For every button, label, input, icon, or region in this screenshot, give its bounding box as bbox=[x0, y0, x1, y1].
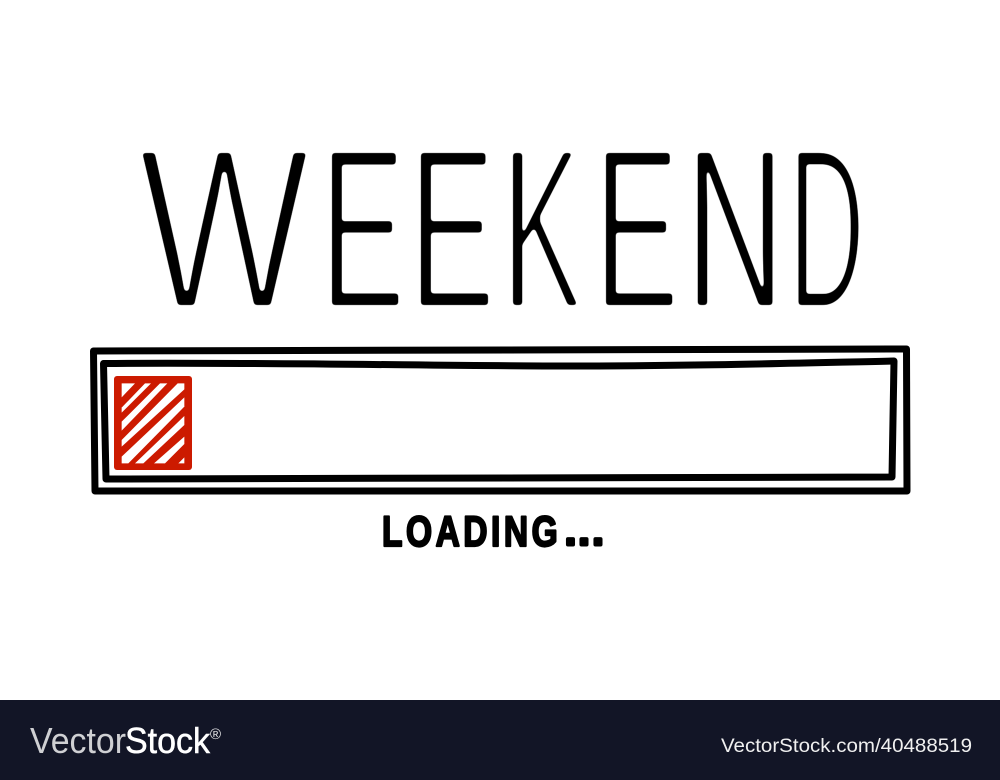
loading dots: ... bbox=[566, 512, 603, 552]
loading label bbox=[382, 508, 603, 556]
red striped progress block bbox=[114, 376, 192, 470]
letters EEKEND bbox=[321, 100, 865, 358]
footer band bbox=[0, 700, 1000, 780]
letter W: W bbox=[138, 100, 310, 357]
loading word: LOADING bbox=[382, 508, 561, 556]
letters EEKEND: D bbox=[789, 100, 865, 357]
progress bar bbox=[94, 349, 907, 491]
letters EEKEND: K bbox=[502, 100, 582, 357]
footer logo: VectorStock bbox=[30, 720, 221, 761]
bar inner frame bbox=[104, 361, 894, 479]
footer logo: VectorStock: Stock bbox=[125, 720, 211, 761]
letters EEKEND: E bbox=[595, 101, 679, 358]
footer logo: VectorStock: ® bbox=[210, 726, 221, 743]
letters EEKEND: N bbox=[686, 102, 785, 358]
letters EEKEND: E bbox=[410, 101, 494, 357]
letters EEKEND: E bbox=[321, 101, 405, 358]
title: WEEKEND bbox=[138, 100, 865, 358]
footer logo: VectorStock: Vector bbox=[30, 720, 126, 761]
footer image id: VectorStock.com/40488519 bbox=[721, 735, 972, 757]
bar outer frame bbox=[94, 349, 907, 491]
